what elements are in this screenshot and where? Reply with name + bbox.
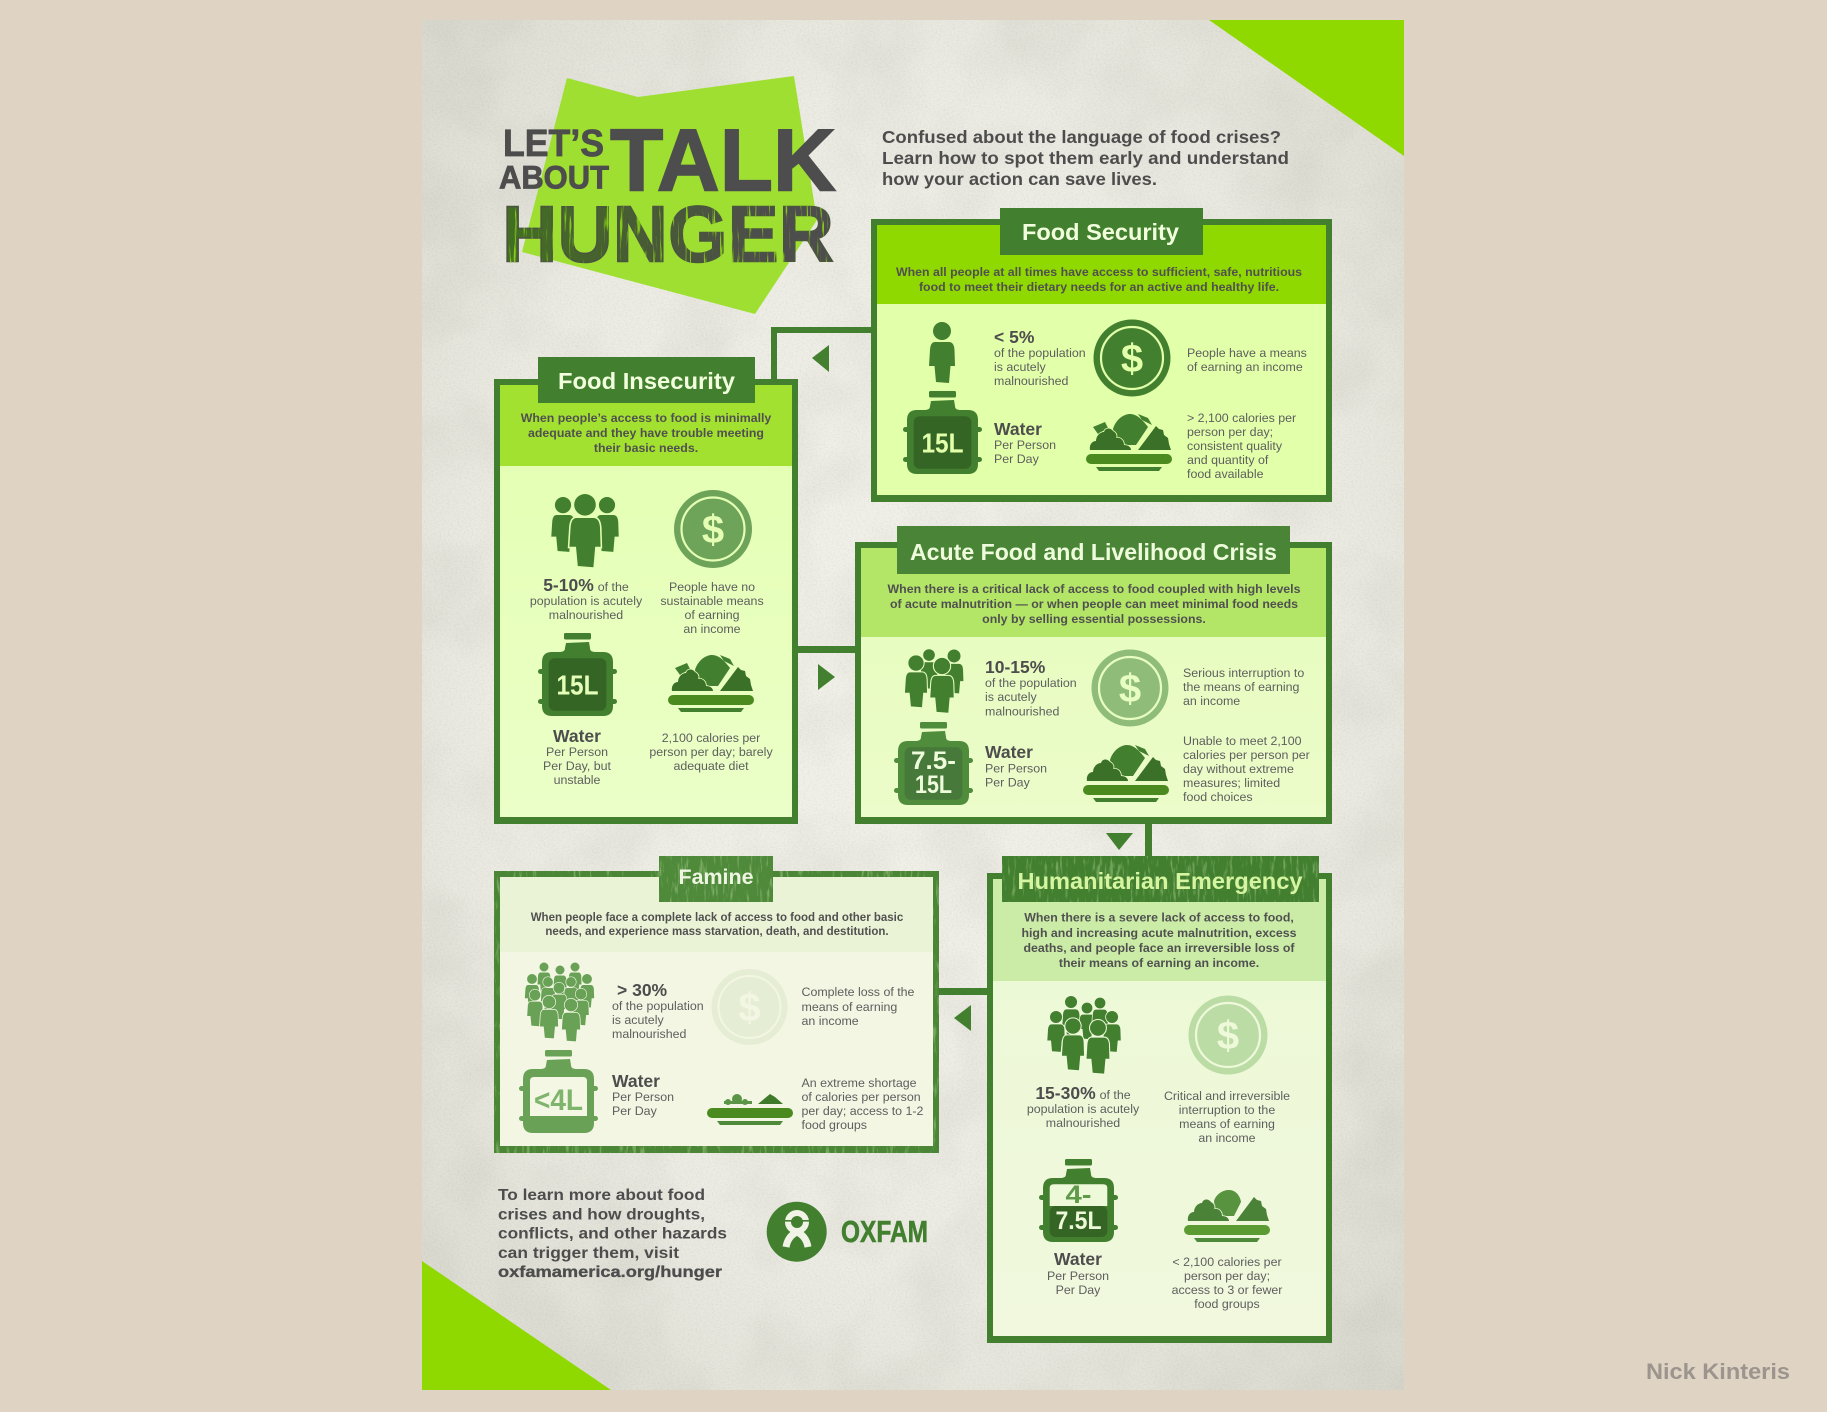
icon: single person [929,322,955,383]
icon: dollar coin [712,969,788,1045]
stat: population share [994,327,1086,388]
paper background [422,20,1404,1390]
text: income: interruption to the [1179,1103,1275,1117]
heading tab: food insecurity: Food Insecurity [558,368,735,394]
stat: population share: of the [598,580,629,594]
text: calories: person per day; [1187,425,1273,439]
icon: dollar coin: $ [738,986,761,1030]
connector: humanitarian emergency to famine [939,988,987,995]
icon: group of people [905,649,963,713]
title background shape [522,76,817,314]
intro text: Learn how to spot them early and understand [882,148,1289,168]
icon: salad bowl [1083,745,1169,802]
text: calories: 2,100 calories per [662,731,760,745]
description: food security: When all people at all times have access to sufficient, safe, nutritious [896,265,1302,279]
corner triangle: bottom left [422,1261,611,1390]
text: income: an income [683,622,741,636]
title: HUNGER [502,190,834,278]
text: calories: access to 3 or fewer [1172,1283,1282,1297]
corner triangle: top right [1209,20,1404,156]
description: food security: food to meet their dietary needs for an active and healthy life. [919,280,1279,294]
stat: water: Water [985,742,1033,762]
text: income: sustainable means [660,594,764,608]
icon: water bottle 15L: 15L [922,428,964,458]
stat: population share: of the population [612,999,704,1013]
text: income: People have no [669,580,755,594]
stat: water [1047,1249,1109,1297]
icon: water bottle 4-7.5L: 4- [1066,1181,1092,1209]
stat: water: Per Day, but [543,759,612,773]
text: income: means of earning [802,1000,897,1014]
stat: population share: 10-15% [985,657,1046,677]
stat: population share: of the population [994,346,1086,360]
text: income: an income [802,1014,859,1028]
description: acute crisis: When there is a critical lack of access to food coupled with high levels [888,582,1301,596]
stat: water: Per Person [985,762,1047,776]
heading tab: acute crisis: Acute Food and Livelihood Crisis [910,539,1277,565]
stat: water: Per Day [994,452,1040,466]
icon: salad bowl [668,655,754,712]
stat: water: Per Person [546,745,608,759]
icon: water bottle <4L: <4L [534,1084,583,1117]
stat: population share: malnourished [612,1027,686,1041]
icon: large group of people [1047,996,1121,1074]
call to action text: crises and how droughts, [498,1206,705,1224]
stat: water: Per Day [1056,1283,1101,1297]
title [499,110,836,278]
text: calories: of calories per person [802,1090,921,1104]
icon: water bottle 4-7.5L [1039,1159,1118,1242]
text: calories: calories per person per [1183,748,1310,762]
description: humanitarian emergency: high and increasing acute malnutrition, excess [1021,926,1297,940]
stat: population share: is acutely [994,360,1046,374]
icon: dollar coin [1094,320,1170,396]
description: food insecurity: their basic needs. [594,441,698,455]
stat: population share [985,657,1077,718]
call to action text [498,1187,727,1281]
stat: water [985,742,1047,790]
arrow: left to food insecurity [812,345,829,372]
icon: water bottle <4L [519,1050,598,1133]
panel: humanitarian emergency [987,856,1332,1343]
stat: population share [612,980,704,1041]
panel: acute food and livelihood crisis [855,526,1332,824]
stat: population share: 15-30% [1035,1083,1096,1103]
description: humanitarian emergency: When there is a severe lack of access to food, [1024,910,1294,924]
stat: water: Per Day [985,776,1031,790]
stat: water: Per Day [612,1104,658,1118]
text: income: means of earning [1179,1117,1275,1131]
icon: water bottle 7.5-15L [894,722,973,805]
text: income: Complete loss of the [802,985,915,999]
credit: author name: Nick Kinteris [1646,1359,1790,1384]
stat: water: Water [1054,1249,1102,1269]
text: calories: day without extreme [1183,762,1294,776]
connector: acute crisis to humanitarian emergency [1145,824,1152,864]
arrow: down to humanitarian emergency [1106,833,1133,850]
text: calories: and quantity of [1187,453,1269,467]
stat: population share: malnourished [549,608,623,622]
intro text [882,127,1289,189]
heading tab: famine [659,856,773,902]
text: calories: measures; limited [1183,776,1280,790]
title: LET’S [503,122,604,165]
stat: population share [530,575,643,622]
stat: water [612,1071,674,1118]
icon: water bottle 15L: 15L [556,670,598,700]
stat: water: Water [612,1071,660,1091]
text: calories: < 2,100 calories per [1172,1255,1282,1269]
text: calories: food groups [802,1118,867,1132]
arrow: right to acute crisis [818,664,835,690]
description: food insecurity: adequate and they have trouble meeting [528,426,764,440]
stat: population share: malnourished [994,374,1068,388]
icon: water bottle 4-7.5L: 7.5L [1056,1207,1102,1235]
text: calories: person per day; barely [649,745,773,759]
icon: salad bowl [1086,414,1172,471]
stat: population share: malnourished [985,704,1059,718]
stat: population share: of the [1100,1088,1131,1102]
intro text: Confused about the language of food crises? [882,127,1281,147]
stat: population share: of the population [985,676,1077,690]
stat: water [994,419,1056,466]
description: famine: needs, and experience mass starvation, death, and destitution. [545,926,889,938]
heading tab: food insecurity [538,357,755,403]
heading tab: famine: Famine [678,865,754,889]
logo: oxfam [767,1202,928,1262]
heading tab: humanitarian emergency [1002,856,1319,902]
icon: crowd of people [525,962,594,1041]
stat: water: unstable [554,773,601,787]
stat: population share: is acutely [612,1013,664,1027]
stat: water: Water [994,419,1042,439]
icon: dollar coin [1188,996,1268,1074]
text: income: the means of earning [1183,680,1300,694]
text: calories: food groups [1194,1297,1260,1311]
description: humanitarian emergency: deaths, and people face an irreversible loss of [1024,941,1295,955]
text: income: of earning [684,608,740,622]
text: calories: per day; access to 1-2 [802,1104,924,1118]
call to action text: oxfamamerica.org/hunger [498,1264,722,1281]
title: TALK [610,110,836,210]
stat: population share: > 30% [617,980,668,1000]
text: income: of earning an income [1187,360,1303,374]
stat: population share: 5-10% [543,575,594,595]
stat: water: Water [553,726,601,746]
intro text: how your action can save lives. [882,169,1157,189]
heading tab: food security [1000,208,1203,255]
text: income: Serious interruption to [1183,666,1304,680]
text: calories: food available [1187,467,1264,481]
description: famine: When people face a complete lack of access to food and other basic [531,912,904,924]
arrow: left to famine [954,1005,971,1031]
icon: water bottle 7.5-15L: 15L [915,771,952,799]
stat: water [543,726,612,787]
text: calories: person per day; [1184,1269,1270,1283]
text: calories: An extreme shortage [802,1076,917,1090]
icon: water bottle 15L [538,633,617,716]
text: calories: adequate diet [673,759,749,773]
description: acute crisis: only by selling essential possessions. [982,612,1206,626]
title: ABOUT [499,160,609,196]
icon: water bottle 15L [903,391,982,474]
logo: oxfam: OXFAM [841,1214,928,1249]
heading tab: humanitarian emergency: Humanitarian Emergency [1018,868,1303,894]
icon: small group of people [551,494,619,567]
text: calories: > 2,100 calories per [1187,411,1296,425]
connector: food insecurity to acute crisis [798,646,855,653]
call to action text: conflicts, and other hazards [498,1226,727,1242]
connector: food security to food insecurity [774,330,871,380]
heading tab: acute crisis [897,526,1290,574]
stat: population share: < 5% [994,327,1035,347]
text: income: an income [1198,1131,1256,1145]
icon: water bottle 7.5-15L: 7.5- [911,747,956,775]
icon: dollar coin [1092,650,1168,726]
description: food insecurity: When people’s access to food is minimally [521,411,771,425]
panel: food insecurity [494,357,798,824]
text: income: Critical and irreversible [1164,1089,1290,1103]
stat: population share: is acutely [985,690,1037,704]
text: calories: Unable to meet 2,100 [1183,734,1302,748]
panel: food security [871,208,1332,502]
icon: nearly empty salad bowl [707,1094,793,1125]
description: acute crisis: of acute malnutrition — or when people can meet minimal food needs [890,597,1298,611]
panel: famine [494,856,939,1153]
heading tab: food security: Food Security [1022,219,1179,245]
call to action text: To learn more about food [498,1187,705,1204]
text: calories: consistent quality [1187,439,1283,453]
icon: dollar coin [674,490,752,568]
icon: dollar coin: $ [1119,667,1141,711]
text: calories: food choices [1183,790,1253,804]
text: income: People have a means [1187,346,1307,360]
icon: salad bowl [1184,1190,1270,1242]
stat: water: Per Person [1047,1269,1109,1283]
stat: population share [1027,1083,1140,1130]
stat: population share: population is acutely [1027,1102,1140,1116]
icon: dollar coin: $ [1217,1014,1239,1058]
stat: water: Per Person [612,1090,674,1104]
icon: dollar coin: $ [1121,337,1143,381]
text: income: an income [1183,694,1240,708]
stat: water: Per Person [994,438,1056,452]
call to action text: can trigger them, visit [498,1245,680,1262]
stat: population share: malnourished [1046,1116,1120,1130]
icon: dollar coin: $ [702,508,724,552]
description: humanitarian emergency: their means of earning an income. [1059,956,1259,970]
stat: population share: population is acutely [530,594,643,608]
